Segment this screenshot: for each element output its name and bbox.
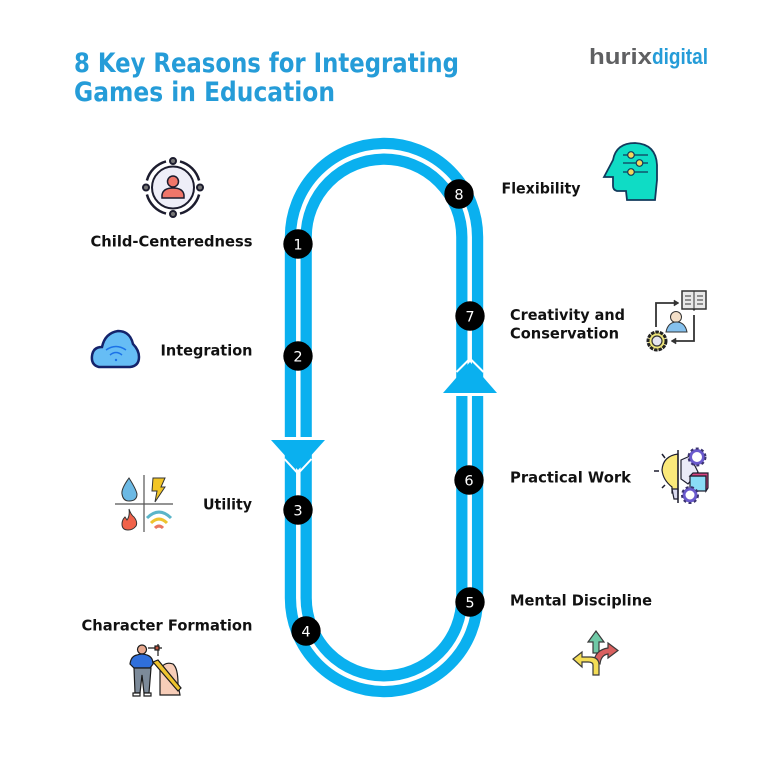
title (74, 48, 459, 108)
icon: head with sliders (604, 143, 657, 200)
logo: hurix digital: digital (652, 44, 708, 69)
step marker 7: 7 (465, 310, 475, 326)
step marker 2 (283, 341, 313, 371)
label: Creativity and Conservation: Conservation (510, 324, 619, 342)
arrow: up (443, 358, 497, 393)
step marker 1 (283, 229, 313, 259)
title: 8 Key Reasons for Integrating (74, 48, 459, 79)
step marker 3 (283, 495, 313, 525)
label: Character Formation: Character Formation (82, 616, 252, 634)
icon: branching arrows (573, 631, 618, 675)
looped track (280, 151, 488, 684)
logo: hurix digital: hurix (589, 44, 653, 69)
label: Integration: Integration (160, 342, 252, 360)
logo: hurix digital (589, 44, 708, 69)
step marker 3: 3 (293, 504, 303, 520)
icon: child in target circle (143, 158, 203, 217)
label: Creativity and Conservation (510, 306, 625, 342)
title: Games in Education (74, 77, 335, 108)
label: Child-Centeredness: Child-Centeredness (90, 232, 252, 250)
label: Flexibility: Flexibility (502, 180, 580, 198)
step marker 6 (454, 465, 484, 495)
icon: four elements (115, 475, 173, 532)
arrow: down (271, 440, 325, 474)
step marker 6: 6 (464, 474, 474, 490)
icon: wifi cloud (92, 331, 139, 367)
step marker 4: 4 (301, 624, 311, 640)
icon: book, person and gear cycle (648, 291, 706, 350)
icon: man and pen (130, 644, 181, 696)
step marker 5 (455, 587, 485, 617)
label: Practical Work: Practical Work (510, 468, 632, 486)
label: Creativity and Conservation: Creativity and (510, 306, 625, 324)
label: Utility: Utility (203, 496, 252, 514)
step marker 1: 1 (293, 238, 303, 254)
step marker 5: 5 (465, 596, 475, 612)
step marker 4 (291, 616, 321, 646)
step marker 2: 2 (293, 350, 303, 366)
step marker 8: 8 (454, 188, 464, 204)
step marker 8 (444, 179, 474, 209)
label: Mental Discipline: Mental Discipline (510, 592, 652, 610)
icon: bulb and gears (654, 448, 708, 503)
step marker 7 (455, 301, 485, 331)
